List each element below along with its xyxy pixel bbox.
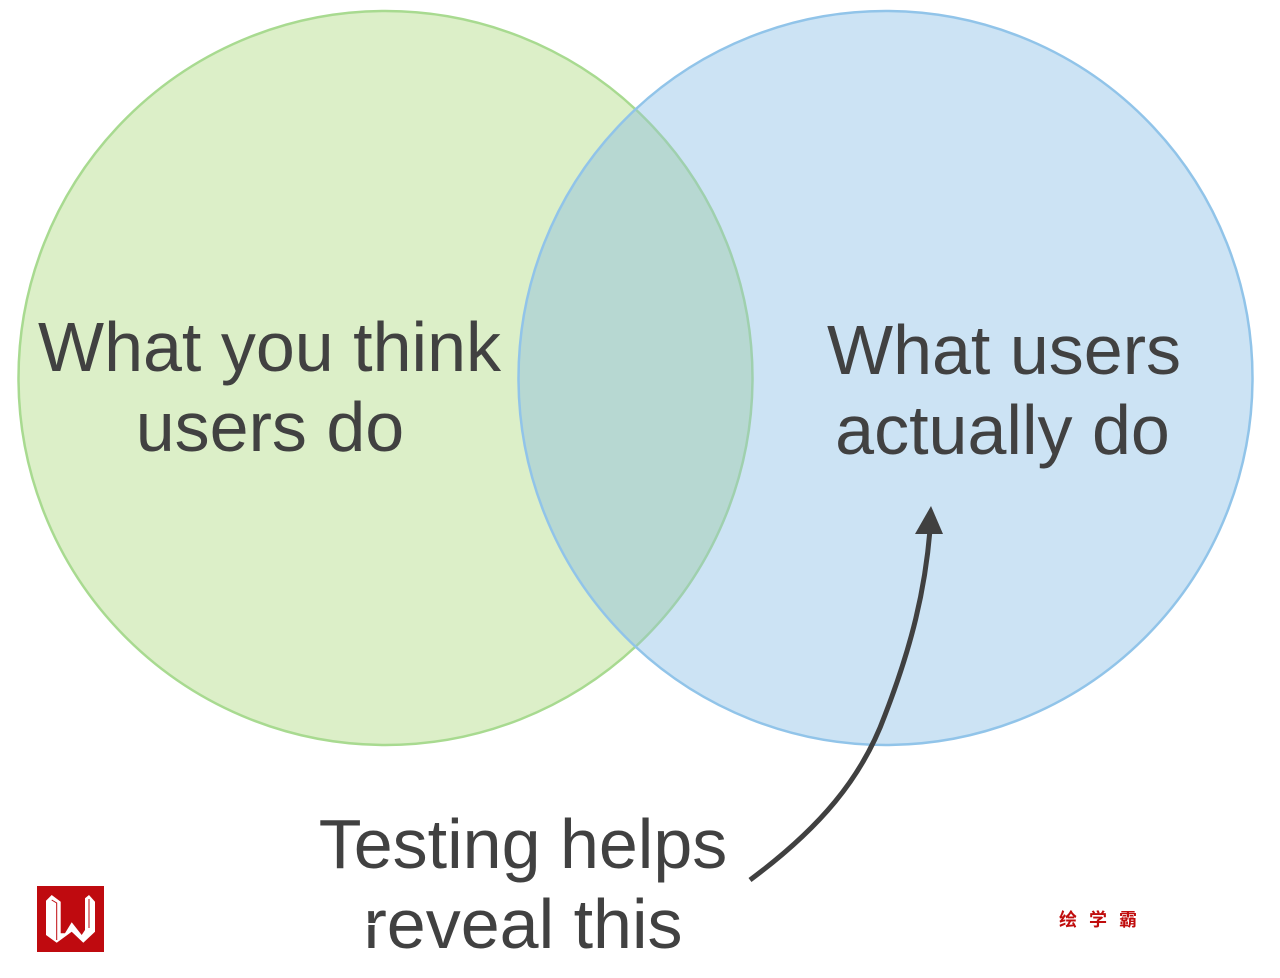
brand text: 霸 — [1119, 910, 1137, 930]
circle outline: blue — [518, 11, 1252, 745]
caption: testing helps reveal this: Testing helps — [319, 805, 727, 883]
brand text: 绘 — [1059, 909, 1077, 930]
label: what you think users do: users do — [136, 388, 404, 466]
circle: what users actually do — [518, 11, 1252, 745]
brand text: 学 — [1089, 909, 1107, 930]
caption: testing helps reveal this: reveal this — [363, 885, 683, 963]
circle: what you think users do — [18, 11, 752, 745]
label: what users actually do: actually do — [835, 391, 1170, 469]
small white mark on caption — [367, 923, 375, 925]
label: what you think users do: What you think — [38, 308, 501, 386]
logo: red W mark — [37, 886, 104, 952]
overlap region — [520, 110, 754, 646]
brand text — [1059, 909, 1137, 930]
arrow: from caption to blue circle — [750, 506, 943, 880]
label: what users actually do: What users — [827, 311, 1181, 389]
venn diagram — [18, 11, 1252, 745]
